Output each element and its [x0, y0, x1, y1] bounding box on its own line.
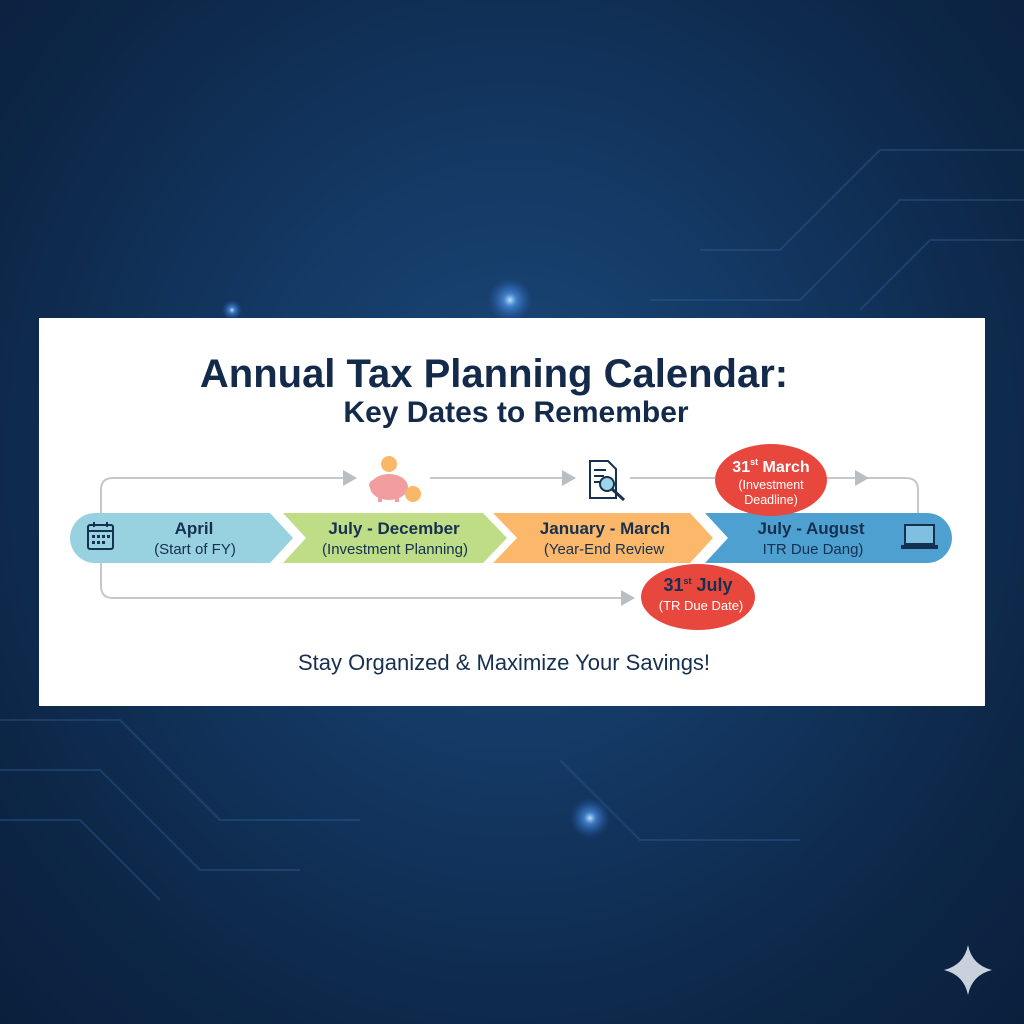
icon: document magnifier	[590, 461, 624, 500]
callout: 31st July: 31	[663, 575, 683, 595]
callout: 31st July	[641, 564, 755, 630]
footer text: Stay Organized & Maximize Your Savings!	[298, 650, 710, 675]
segment: April	[70, 513, 293, 563]
segment: January - March	[493, 513, 713, 563]
segment: January - March: January - March	[540, 519, 670, 538]
segment: April: April	[175, 519, 213, 538]
segment: July - August: ITR Due Dang)	[763, 541, 863, 558]
panel: calendar card	[39, 318, 985, 706]
icon: laptop	[901, 525, 938, 549]
icon: piggy bank	[369, 456, 421, 502]
segment: July - December: (Investment Planning)	[322, 541, 468, 558]
segment: July - December: July - December	[328, 519, 460, 538]
segment: July - August: July - August	[757, 519, 865, 538]
segment: January - March: (Year-End Review	[544, 541, 664, 558]
segment: July - December	[283, 513, 507, 563]
callout: 31st July: st	[683, 576, 692, 586]
callout: 31st March	[715, 444, 827, 516]
segment: April: (Start of FY)	[154, 541, 236, 558]
callout: 31st March: Deadline)	[744, 493, 798, 507]
callout: 31st July: July	[692, 575, 733, 595]
callout: 31st March: (Investment	[738, 478, 804, 492]
segment: July - August	[705, 513, 952, 563]
timeline connector lines	[101, 478, 918, 598]
callout: 31st March: 31	[732, 459, 750, 476]
arrows	[343, 470, 869, 606]
icon: calendar	[88, 522, 113, 549]
callout: 31st March: March	[758, 459, 810, 476]
icon: sparkle	[944, 945, 992, 995]
subtitle: Key Dates to Remember	[343, 396, 689, 429]
background circuit lines	[0, 150, 1024, 900]
callout: 31st July: (TR Due Date)	[659, 598, 743, 613]
callout: 31st March: st	[750, 457, 758, 467]
title: Annual Tax Planning Calendar:	[200, 352, 788, 396]
